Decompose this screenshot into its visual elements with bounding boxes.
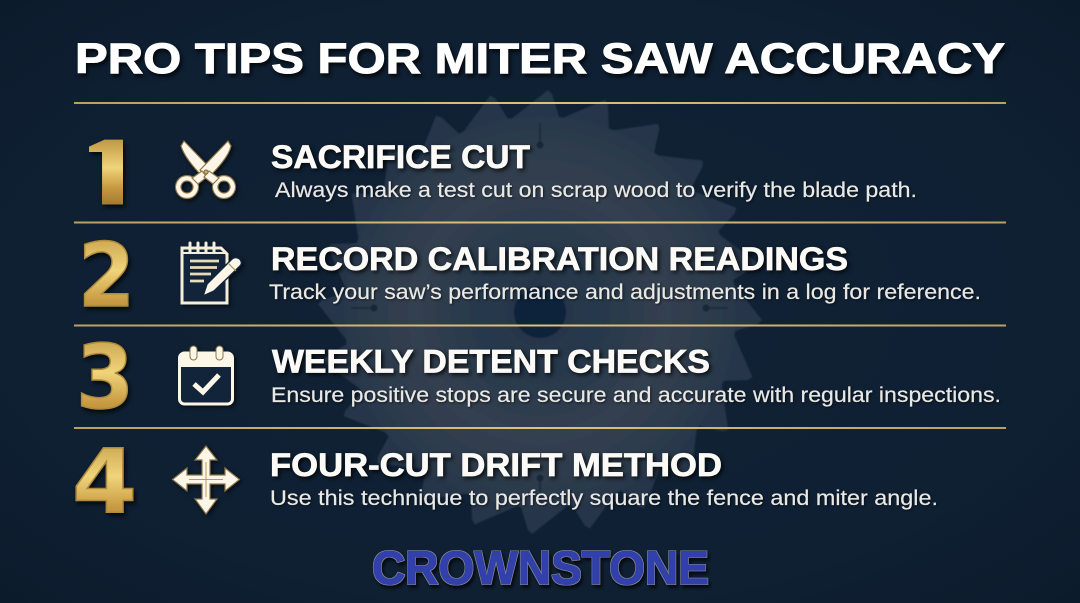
icon: calendar with check bbox=[180, 346, 232, 404]
heading: WEEKLY DETENT CHECKS bbox=[272, 344, 710, 380]
icon: scissors bbox=[176, 141, 236, 199]
icon: notepad and pencil bbox=[182, 243, 241, 303]
description: Use this technique to perfectly square the fence and miter angle. bbox=[270, 487, 938, 510]
saw blade watermark bbox=[318, 90, 762, 534]
title: PRO TIPS FOR MITER SAW ACCURACY bbox=[75, 35, 1005, 83]
description: Ensure positive stops are secure and accurate with regular inspections. bbox=[271, 384, 1001, 407]
description: Always make a test cut on scrap wood to verify the blade path. bbox=[275, 179, 917, 202]
number 1: 1 bbox=[74, 123, 146, 223]
number 2: 2 bbox=[78, 224, 135, 327]
heading: FOUR-CUT DRIFT METHOD bbox=[270, 447, 722, 483]
tip 1 bbox=[89, 140, 916, 209]
tip 2 bbox=[78, 224, 981, 327]
number 4: 4 bbox=[72, 430, 137, 533]
icon: four-way arrows bbox=[172, 446, 240, 514]
brand logo: CROWNSTONE bbox=[372, 541, 709, 594]
description: Track your saw’s performance and adjustments in a log for reference. bbox=[269, 281, 981, 304]
tip 4 bbox=[72, 430, 938, 533]
tip 3 bbox=[76, 326, 1001, 429]
number 3: 3 bbox=[76, 326, 134, 429]
heading: SACRIFICE CUT bbox=[271, 139, 530, 175]
heading: RECORD CALIBRATION READINGS bbox=[271, 241, 848, 277]
